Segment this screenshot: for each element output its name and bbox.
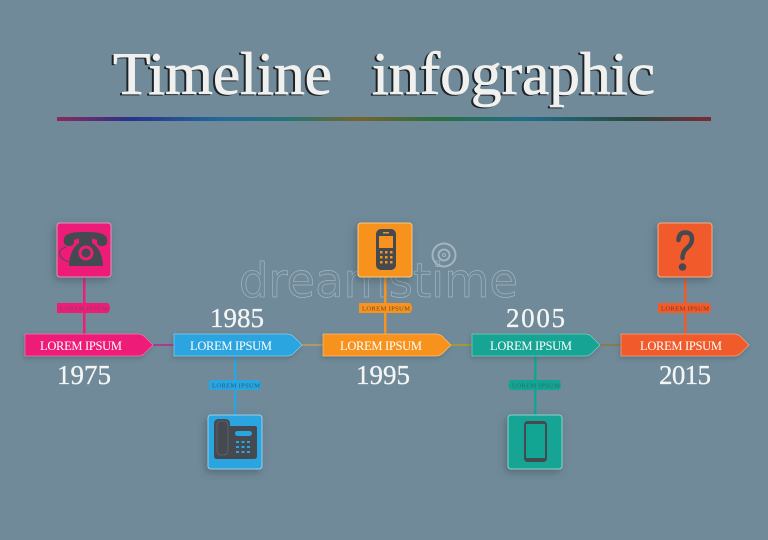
connector: 1995 to 2005 bbox=[451, 344, 472, 346]
title: infographic bbox=[370, 42, 653, 108]
arrow bar bbox=[174, 334, 302, 356]
small tag: LOREM IPSUM bbox=[362, 306, 410, 312]
stem bbox=[234, 356, 236, 415]
stem bbox=[384, 277, 386, 334]
stem bbox=[684, 277, 686, 334]
arrow bar bbox=[323, 334, 451, 356]
small tag bbox=[57, 303, 110, 313]
year: 1995 bbox=[356, 360, 410, 390]
year: 1985 bbox=[210, 303, 264, 333]
icon: mobile phone bbox=[358, 223, 412, 277]
arrow bar: LOREM IPSUM bbox=[40, 339, 122, 353]
milestone: 1975 bbox=[25, 223, 153, 390]
arrow bar: LOREM IPSUM bbox=[640, 339, 722, 353]
arrow bar: LOREM IPSUM bbox=[340, 339, 422, 353]
title underline bbox=[57, 117, 711, 121]
connector: 2005 to 2015 bbox=[600, 344, 621, 346]
year: 2005 bbox=[506, 303, 565, 333]
small tag: LOREM IPSUM bbox=[60, 306, 108, 312]
year: 2015 bbox=[659, 360, 711, 390]
title: Timeline bbox=[111, 42, 330, 108]
year: 1975 bbox=[57, 360, 111, 390]
stem bbox=[534, 356, 536, 415]
arrow bar: LOREM IPSUM bbox=[490, 339, 572, 353]
icon: rotary telephone bbox=[57, 223, 111, 277]
title: Timeline bbox=[113, 41, 332, 107]
arrow bar bbox=[25, 334, 153, 356]
watermark: dreamstime bbox=[239, 254, 518, 309]
milestone: 2015 bbox=[621, 223, 749, 390]
connector: 1985 to 1995 bbox=[302, 344, 323, 346]
arrow bar bbox=[621, 334, 749, 356]
milestone: 2005 bbox=[472, 303, 600, 469]
arrow bar bbox=[472, 334, 600, 356]
icon: question mark bbox=[658, 223, 712, 277]
small tag: LOREM IPSUM bbox=[661, 306, 709, 312]
stem bbox=[83, 277, 86, 334]
arrow bar: LOREM IPSUM bbox=[190, 339, 272, 353]
small tag bbox=[208, 380, 261, 390]
small tag bbox=[508, 380, 561, 390]
icon: smartphone bbox=[508, 415, 562, 469]
connector: 1975 to 1985 bbox=[153, 344, 174, 346]
small tag: LOREM IPSUM bbox=[512, 382, 560, 390]
title bbox=[111, 41, 655, 108]
small tag bbox=[658, 303, 711, 313]
title: infographic bbox=[372, 41, 655, 107]
small tag: LOREM IPSUM bbox=[212, 382, 260, 390]
milestone: 1995 bbox=[323, 223, 451, 390]
small tag bbox=[359, 303, 412, 313]
icon: desk phone bbox=[208, 415, 262, 469]
milestone: 1985 bbox=[174, 303, 302, 469]
